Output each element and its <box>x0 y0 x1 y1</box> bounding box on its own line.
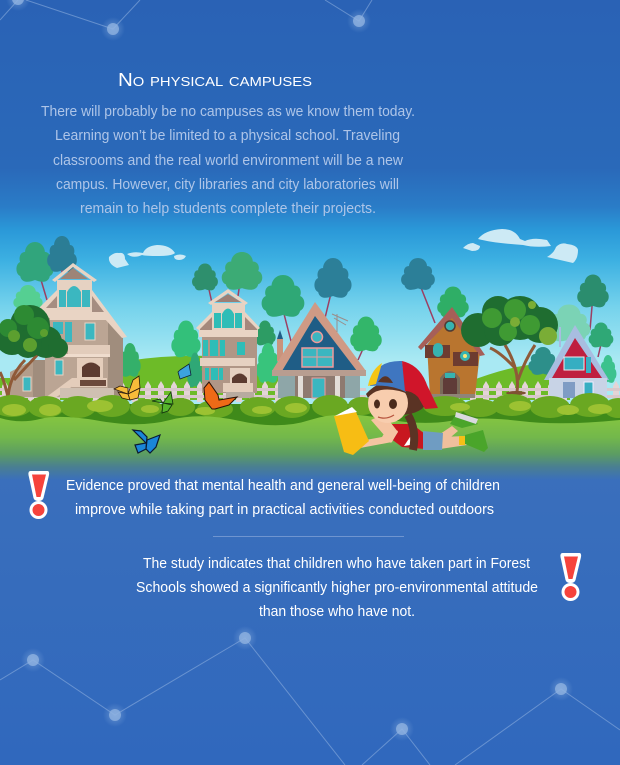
butterfly: green <box>152 392 173 413</box>
exclamation icon: left <box>28 471 49 519</box>
butterfly: yellow <box>114 376 140 400</box>
house: brown cottage <box>418 307 485 398</box>
cap <box>368 361 438 409</box>
callout: study text: The study indicates that children who have taken part in Forest <box>143 556 530 572</box>
intro text block <box>41 103 415 217</box>
intro text block: There will probably be no campuses as we know them today. <box>41 103 415 120</box>
fence <box>0 378 620 402</box>
callout: study text: than those who have not. <box>259 604 415 620</box>
callout: evidence text <box>66 478 500 518</box>
braid behind face <box>408 415 414 450</box>
callout: study text <box>136 556 538 620</box>
head <box>366 381 427 423</box>
arm and hand <box>360 414 398 448</box>
hedge <box>0 393 620 426</box>
book <box>334 407 369 455</box>
background hills <box>0 356 570 400</box>
butterfly: small blue <box>178 364 191 379</box>
background trees <box>13 236 616 387</box>
exclamation icon: right <box>560 553 581 601</box>
tree: left foreground <box>0 305 68 397</box>
girl reading a book <box>334 361 488 455</box>
clouds <box>109 229 578 268</box>
intro text block: classrooms and the real world environment will be a new <box>53 152 403 169</box>
callout: evidence text: Evidence proved that mental health and general well-being of children <box>66 478 500 494</box>
house: second tan house <box>196 289 260 398</box>
butterfly: orange <box>204 382 237 409</box>
legs and shoes <box>440 412 488 452</box>
network decoration: bottom <box>0 626 620 765</box>
house: blue gable house <box>272 302 366 398</box>
house: red gable house <box>544 325 609 398</box>
intro text block: Learning won’t be limited to a physical school. Traveling <box>55 127 400 144</box>
callout: evidence text: improve while taking part in practical activities conducted outdoors <box>75 502 494 518</box>
butterfly: blue <box>133 430 160 453</box>
network decoration: top <box>0 0 372 41</box>
title: No physical campuses <box>118 70 312 90</box>
house: left tall tan house <box>10 263 127 398</box>
intro text block: campus. However, city libraries and city laboratories will <box>56 176 399 193</box>
grass fading into blue <box>0 414 620 480</box>
intro text block: remain to help students complete their projects. <box>80 200 376 217</box>
torso and shorts <box>390 424 443 450</box>
tree: right foreground <box>461 296 558 395</box>
callout: study text: Schools showed a significantly higher pro-environmental attitude <box>136 580 538 596</box>
